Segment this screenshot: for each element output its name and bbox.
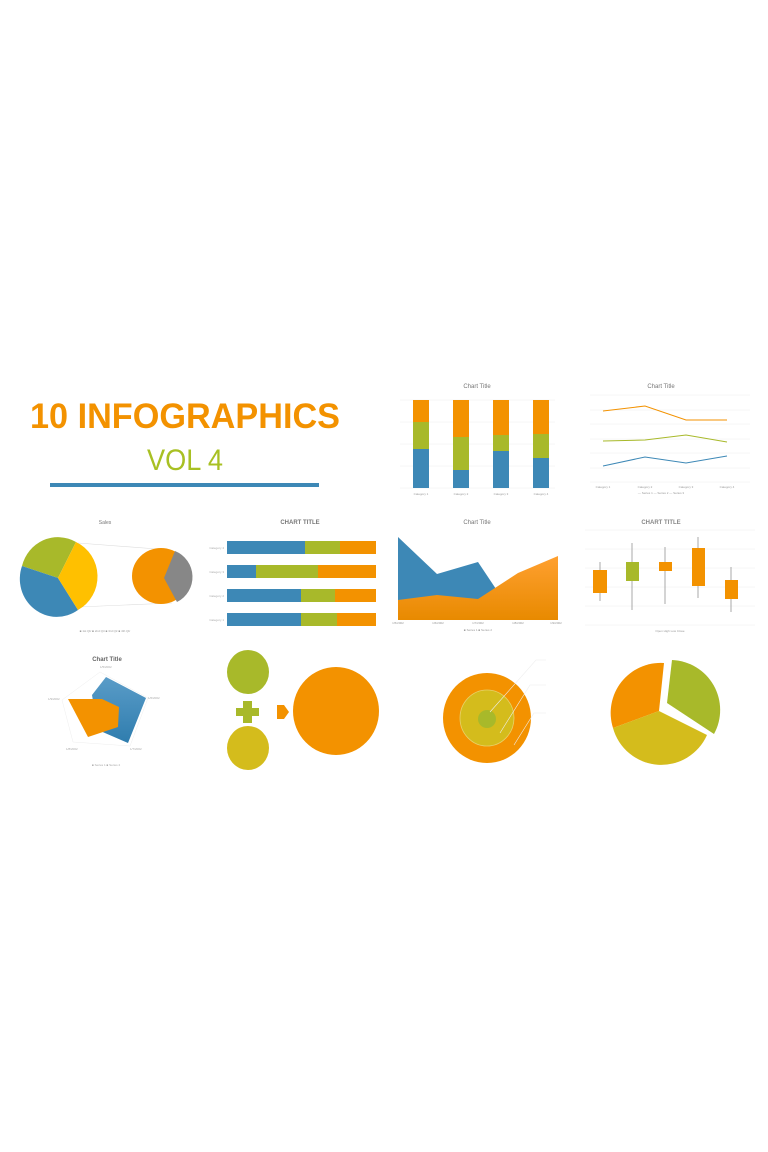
chart: horizontal stacked bars: Category 3 bbox=[209, 570, 224, 574]
chart: stacked column: Category 1 bbox=[414, 492, 429, 496]
chart: pie of pie: ■ 1st Qtr ■ 2nd Qtr ■ 3rd Qtr ■ 4th Qtr bbox=[80, 629, 130, 633]
chart: candlestick bbox=[585, 520, 755, 633]
chart: line: Category 4 bbox=[720, 485, 735, 489]
chart: line: Category 3 bbox=[679, 485, 694, 489]
chart: horizontal stacked bars: Category 4 bbox=[209, 546, 224, 550]
chart: pie of pie: Sales bbox=[99, 520, 112, 526]
chart: radar: 1/9/2002 bbox=[48, 697, 60, 701]
chart: line bbox=[590, 384, 750, 495]
chart: candlestick: CHART TITLE bbox=[641, 520, 681, 526]
chart: stacked column: Chart Title bbox=[463, 384, 491, 390]
chart: radar: Chart Title bbox=[92, 657, 122, 663]
chart: area: 1/5/2002 bbox=[392, 621, 404, 625]
chart: line: Chart Title bbox=[647, 384, 675, 390]
chart: area: Chart Title bbox=[463, 520, 491, 526]
chart: area: 1/8/2002 bbox=[512, 621, 524, 625]
chart: stacked column: Category 4 bbox=[534, 492, 549, 496]
chart: radar bbox=[48, 657, 160, 767]
chart: stacked column bbox=[400, 384, 555, 496]
diagram: concentric target bbox=[443, 660, 546, 763]
chart: horizontal stacked bars: CHART TITLE bbox=[280, 520, 320, 526]
chart: radar: 1/7/2002 bbox=[130, 747, 142, 751]
chart: area bbox=[392, 520, 562, 632]
chart: exploded pie bbox=[611, 660, 720, 765]
chart: stacked column: Category 3 bbox=[494, 492, 509, 496]
chart: radar: ■ Series 1 ■ Series 2 bbox=[92, 763, 120, 767]
underline bar bbox=[50, 483, 319, 487]
chart: area: 1/9/2002 bbox=[550, 621, 562, 625]
chart: area: 1/6/2002 bbox=[432, 621, 444, 625]
chart: horizontal stacked bars bbox=[209, 520, 376, 626]
chart: radar: 1/5/2002 bbox=[100, 665, 112, 669]
chart: area: 1/7/2002 bbox=[472, 621, 484, 625]
title: 10 INFOGRAPHICS bbox=[30, 397, 340, 436]
chart: line: — Series 1 — Series 2 — Series 3 bbox=[638, 491, 684, 495]
chart: line: Category 1 bbox=[596, 485, 611, 489]
chart: candlestick: Open High Low Close bbox=[655, 629, 685, 633]
chart: radar: 1/8/2002 bbox=[66, 747, 78, 751]
chart: horizontal stacked bars: Category 1 bbox=[209, 618, 224, 622]
chart: line: Category 2 bbox=[638, 485, 653, 489]
chart: horizontal stacked bars: Category 2 bbox=[209, 594, 224, 598]
diagram: circles plus arrow bbox=[227, 650, 379, 770]
chart: pie of pie bbox=[20, 520, 192, 633]
subtitle: VOL 4 bbox=[147, 444, 223, 477]
chart: radar: 1/6/2002 bbox=[148, 696, 160, 700]
chart: area: ■ Series 1 ■ Series 2 bbox=[464, 628, 492, 632]
chart: stacked column: Category 2 bbox=[454, 492, 469, 496]
